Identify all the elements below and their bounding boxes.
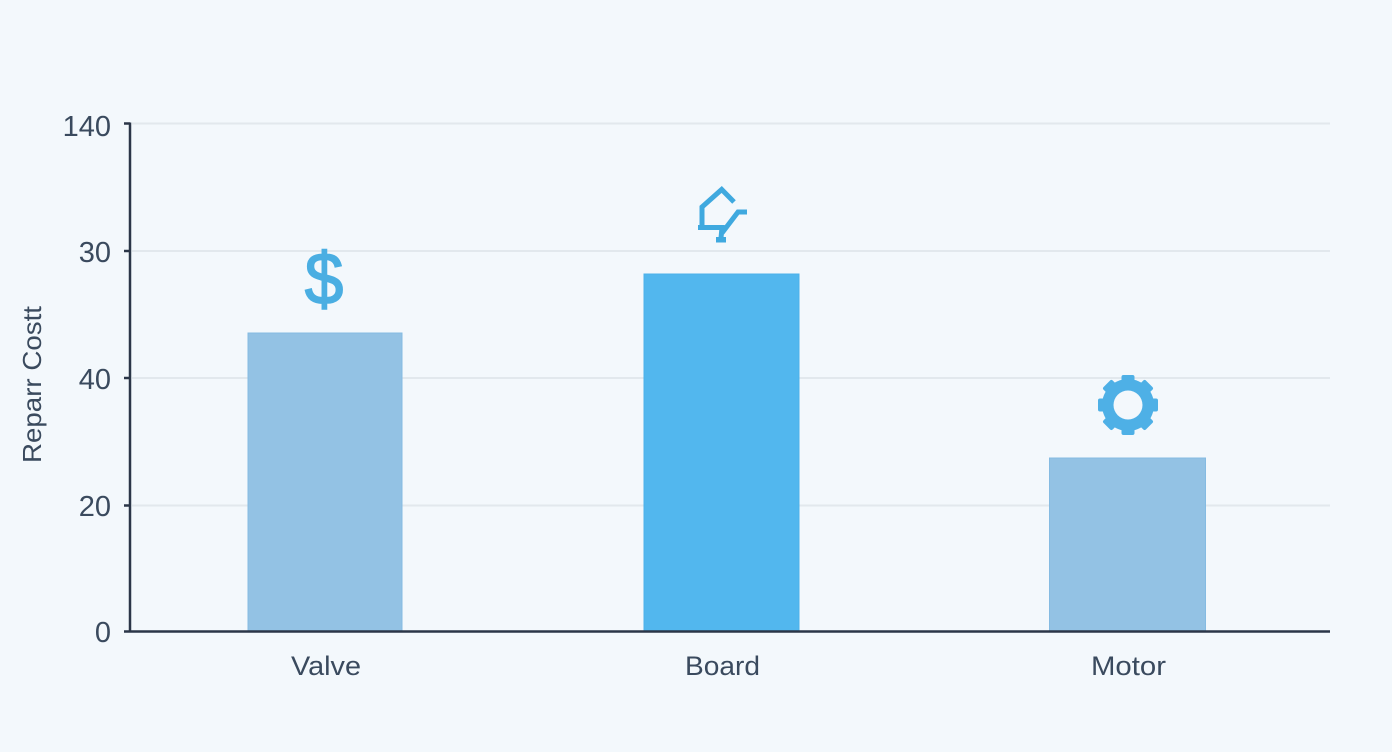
icon: dollar sign: $ — [305, 239, 343, 320]
y axis tick labels: 30 — [79, 237, 111, 269]
x axis category labels — [291, 651, 1166, 681]
y axis tick labels: 40 — [79, 364, 111, 396]
y axis tick labels: 20 — [79, 491, 111, 523]
y axis tick labels: 140 — [63, 111, 111, 143]
y axis tick labels — [63, 111, 111, 649]
y axis — [124, 122, 130, 632]
bar: Board — [644, 274, 799, 631]
bar: Valve — [248, 333, 402, 631]
x axis category labels: Valve — [291, 651, 361, 681]
icon: board circuit house — [698, 190, 747, 242]
y axis tick labels: 0 — [95, 617, 111, 649]
x axis — [124, 630, 1330, 633]
x axis category labels: Board — [685, 651, 760, 681]
bar: Motor — [1050, 458, 1206, 631]
icon: motor gear — [1098, 375, 1158, 435]
x axis category labels: Motor — [1091, 651, 1166, 681]
y axis title: Reparr Costt — [17, 305, 47, 463]
